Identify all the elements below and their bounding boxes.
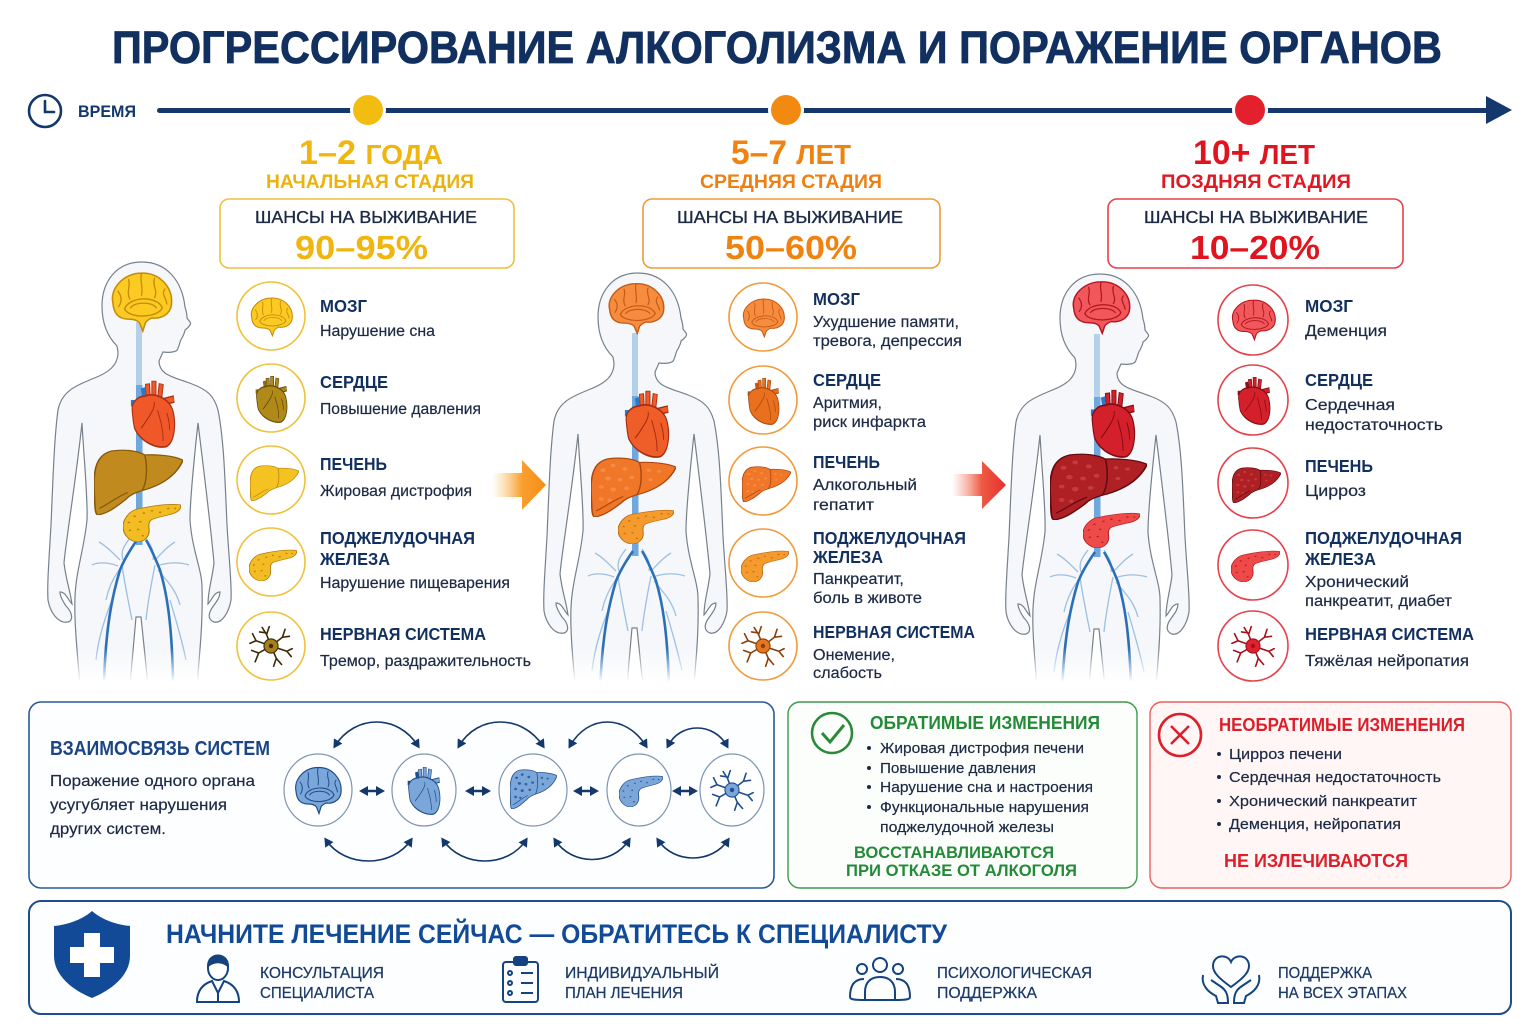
item: nervous system: Тремор, раздражительность (320, 653, 531, 670)
stage 3 heading (1161, 134, 1351, 193)
survival box 1: 90–95% (295, 229, 428, 266)
icon: group of people (850, 958, 910, 1000)
marker: stage 2 (771, 95, 801, 125)
survival box 1 (220, 199, 514, 268)
icon: clipboard (503, 957, 538, 1002)
item: heart: риск инфаркта (813, 414, 926, 431)
item: pancreas: ПОДЖЕЛУДОЧНАЯ (813, 528, 966, 548)
item: pancreas: ПОДЖЕЛУДОЧНАЯ (1305, 528, 1462, 548)
item: heart: недостаточность (1305, 417, 1443, 434)
list: Повышение давления (880, 760, 1036, 777)
arrow: stage 1 to 2 (492, 460, 546, 510)
item: pancreas (729, 528, 966, 607)
organ: pancreas (618, 510, 674, 544)
item: heart: Повышение давления (320, 401, 481, 418)
item: heart: СЕРДЦЕ (1305, 370, 1373, 390)
description: других систем. (50, 821, 166, 838)
item: heart: Сердечная (1305, 397, 1395, 414)
list: Цирроз печени (1229, 746, 1342, 763)
item: brain: тревога, депрессия (813, 333, 962, 350)
item: nervous system (1218, 611, 1474, 681)
organ list: stage 2 (729, 283, 975, 682)
service: psychological support (937, 965, 1092, 1002)
organ: pancreas (123, 504, 181, 542)
item: liver (729, 447, 917, 515)
panel: irreversible changes (1150, 702, 1511, 888)
stage 2 heading: 5–7 ЛЕТ (731, 134, 851, 172)
service: consultation: СПЕЦИАЛИСТА (260, 985, 375, 1002)
organ: liver (1050, 454, 1147, 520)
body figure: stage 1 (40, 262, 235, 701)
item: nervous system (729, 612, 975, 682)
service: support at all stages (1278, 965, 1408, 1002)
list: поджелудочной железы (880, 819, 1054, 836)
survival box 2 (643, 199, 940, 268)
panel: call to action (29, 901, 1511, 1014)
item: pancreas: ЖЕЛЕЗА (812, 547, 883, 567)
organ list: stage 1 (237, 282, 531, 680)
heading: НЕОБРАТИМЫЕ ИЗМЕНЕНИЯ (1219, 715, 1465, 735)
item: liver (1218, 448, 1373, 518)
item: heart (729, 366, 926, 434)
service: treatment plan: ПЛАН ЛЕЧЕНИЯ (565, 985, 683, 1002)
item: brain: Ухудшение памяти, (813, 314, 959, 331)
title: ПРОГРЕССИРОВАНИЕ АЛКОГОЛИЗМА И ПОРАЖЕНИЕ ОРГАНОВ (112, 22, 1442, 73)
service: support at all stages: ПОДДЕРЖКА (1278, 965, 1373, 982)
body figure: stage 3 (998, 274, 1196, 701)
conclusion: ПРИ ОТКАЗЕ ОТ АЛКОГОЛЯ (846, 861, 1077, 880)
survival box 1: ШАНСЫ НА ВЫЖИВАНИЕ (255, 207, 477, 227)
item: nervous system: слабость (813, 665, 882, 682)
survival box 2: ШАНСЫ НА ВЫЖИВАНИЕ (677, 207, 903, 227)
body figure: stage 2 (536, 273, 728, 701)
list: Функциональные нарушения (880, 799, 1089, 816)
list (867, 740, 1093, 836)
item: liver: Жировая дистрофия (320, 483, 472, 500)
organ: pancreas (1083, 513, 1140, 548)
timeline label: ВРЕМЯ (78, 103, 136, 121)
item: pancreas: ЖЕЛЕЗА (319, 549, 390, 569)
item: liver (237, 446, 472, 514)
item: nervous system: НЕРВНАЯ СИСТЕМА (1305, 624, 1474, 644)
marker: stage 3 (1235, 95, 1265, 125)
item: liver: Цирроз (1305, 483, 1366, 500)
survival box 3: ШАНСЫ НА ВЫЖИВАНИЕ (1144, 207, 1368, 227)
stage 1 heading: НАЧАЛЬНАЯ СТАДИЯ (266, 172, 474, 193)
timeline arrow (157, 96, 1512, 124)
item: nervous system: Онемение, (813, 647, 895, 664)
item: pancreas (237, 528, 510, 596)
service: treatment plan (565, 964, 719, 1002)
item: nervous system (237, 612, 531, 680)
stage 1 heading: 1–2 ГОДА (299, 134, 443, 172)
item: brain: Деменция (1305, 323, 1387, 340)
list: Жировая дистрофия печени (880, 740, 1084, 757)
item: heart (237, 364, 481, 432)
list (1217, 746, 1441, 833)
item: heart: СЕРДЦЕ (320, 372, 388, 392)
icon: doctor (197, 956, 239, 1002)
service: consultation: КОНСУЛЬТАЦИЯ (260, 965, 384, 982)
icon: check (812, 713, 852, 753)
list: Хронический панкреатит (1229, 793, 1417, 810)
item: liver: Алкогольный (813, 477, 917, 494)
item: nervous system: НЕРВНАЯ СИСТЕМА (320, 624, 486, 644)
heading: ВЗАИМОСВЯЗЬ СИСТЕМ (50, 738, 270, 760)
item: brain (237, 282, 435, 350)
organ: brain (609, 284, 664, 333)
survival box 3 (1108, 199, 1403, 268)
item: liver: ПЕЧЕНЬ (813, 452, 880, 472)
survival box 2: 50–60% (725, 229, 857, 266)
icon: heart in hands (1203, 956, 1259, 1003)
service: treatment plan: ИНДИВИДУАЛЬНЫЙ (565, 964, 719, 982)
service: support at all stages: НА ВСЕХ ЭТАПАХ (1278, 985, 1408, 1002)
list: Деменция, нейропатия (1229, 816, 1401, 833)
item: liver: ПЕЧЕНЬ (1305, 456, 1373, 476)
item: pancreas (1218, 528, 1462, 610)
organ: liver (591, 458, 676, 517)
item: pancreas: Хронический (1305, 574, 1409, 591)
icon: shield (54, 911, 130, 998)
stage 3 heading: ПОЗДНЯЯ СТАДИЯ (1161, 172, 1351, 193)
icon: clock (29, 95, 61, 127)
item: nervous system: Тяжёлая нейропатия (1305, 653, 1469, 670)
conclusion: НЕ ИЗЛЕЧИВАЮТСЯ (1224, 851, 1408, 871)
item: brain (1218, 285, 1387, 355)
organ: liver (94, 450, 183, 515)
item: pancreas: ЖЕЛЕЗА (1304, 549, 1376, 569)
item: brain: МОЗГ (320, 296, 367, 316)
list: Нарушение сна и настроения (880, 779, 1093, 796)
stage 2 heading: СРЕДНЯЯ СТАДИЯ (700, 172, 882, 193)
description (50, 773, 255, 838)
item: pancreas: Нарушение пищеварения (320, 575, 510, 592)
survival box 3: 10–20% (1190, 229, 1320, 266)
service: psychological support: ПСИХОЛОГИЧЕСКАЯ (937, 965, 1092, 982)
item: brain: МОЗГ (1305, 296, 1353, 316)
organ: brain (1073, 282, 1130, 333)
organ: heart (1091, 390, 1135, 457)
item: nervous system: НЕРВНАЯ СИСТЕМА (813, 622, 975, 642)
conclusion (846, 843, 1077, 880)
description: Поражение одного органа (50, 773, 255, 790)
item: liver: гепатит (813, 497, 874, 514)
panel: reversible changes (788, 702, 1137, 888)
service: consultation (260, 965, 384, 1002)
organ: heart (625, 391, 669, 457)
list: Сердечная недостаточность (1229, 769, 1441, 786)
description: усугубляет нарушения (50, 797, 227, 814)
item: brain (729, 283, 962, 351)
item: pancreas: Панкреатит, (813, 571, 904, 588)
organ chain (284, 722, 764, 861)
heading: НАЧНИТЕ ЛЕЧЕНИЕ СЕЙЧАС — ОБРАТИТЕСЬ К СПЕЦИАЛИСТУ (166, 918, 948, 949)
item: heart: СЕРДЦЕ (813, 370, 881, 390)
item: liver: ПЕЧЕНЬ (320, 454, 387, 474)
item: brain: МОЗГ (813, 289, 860, 309)
heading: ОБРАТИМЫЕ ИЗМЕНЕНИЯ (870, 713, 1100, 733)
conclusion: ВОССТАНАВЛИВАЮТСЯ (854, 843, 1054, 862)
stage 2 heading (700, 134, 882, 193)
timeline (29, 95, 1512, 127)
item: pancreas: панкреатит, диабет (1305, 593, 1452, 610)
item: heart (1218, 365, 1443, 435)
organ: heart (131, 381, 175, 447)
stage 1 heading (266, 134, 474, 193)
stage 3 heading: 10+ ЛЕТ (1193, 134, 1315, 172)
item: heart: Аритмия, (813, 395, 882, 412)
item: pancreas: боль в животе (813, 590, 922, 607)
item: brain: Нарушение сна (320, 323, 435, 340)
arrow: stage 2 to 3 (952, 461, 1006, 509)
icon: cross (1159, 714, 1201, 756)
panel: system interconnection (29, 702, 774, 888)
organ: brain (112, 273, 172, 331)
marker: stage 1 (353, 95, 383, 125)
service: psychological support: ПОДДЕРЖКА (937, 985, 1038, 1002)
item: pancreas: ПОДЖЕЛУДОЧНАЯ (320, 528, 475, 548)
organ list: stage 3 (1218, 285, 1474, 681)
